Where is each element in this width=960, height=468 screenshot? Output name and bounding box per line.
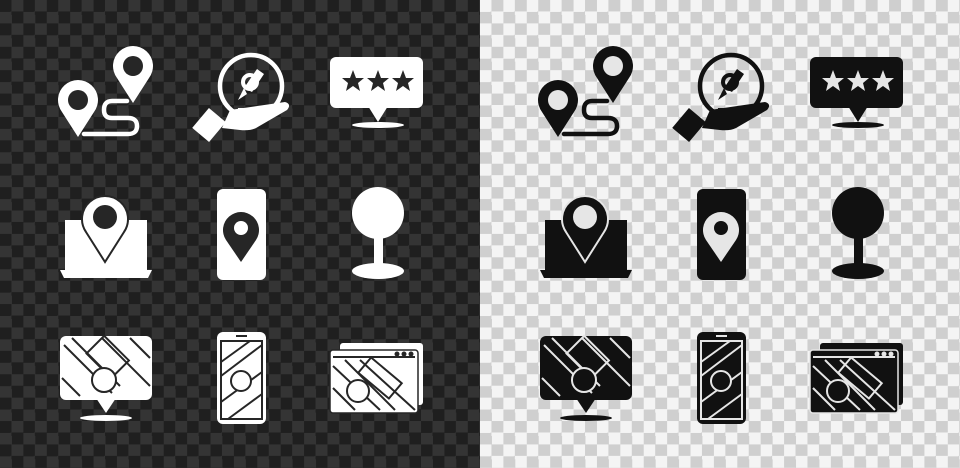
panel: dark icon set: [0, 0, 480, 468]
panel: light icon set: [480, 0, 960, 468]
